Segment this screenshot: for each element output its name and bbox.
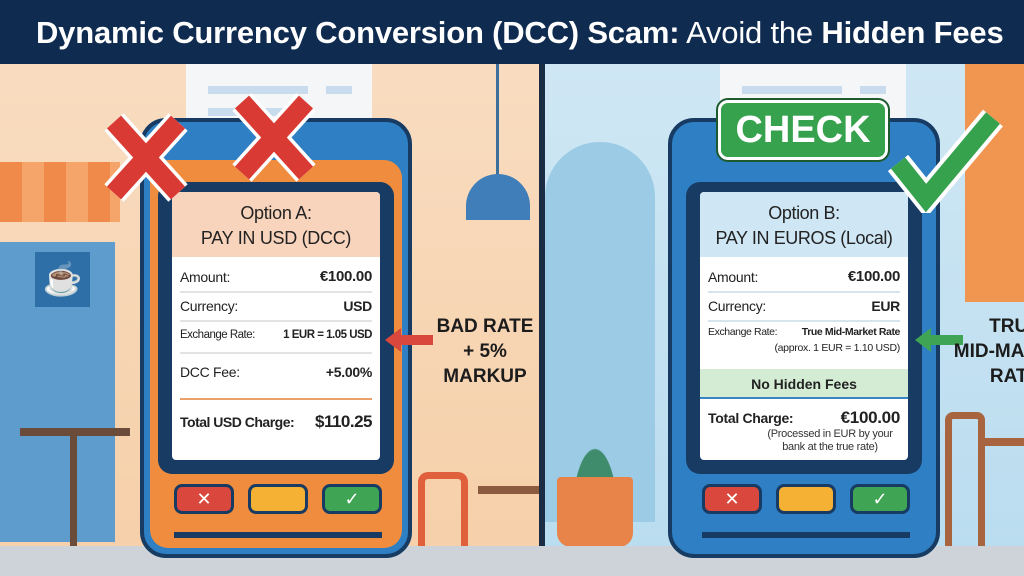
screen: Exchange Rate: [180,329,255,341]
callout: bad rate: MARKUP [443,366,527,387]
screen header A: Option A: [240,203,312,223]
panel: right terminal: ✕ [724,489,740,509]
callout: true mid-market rate [954,316,1024,387]
arrow: red [385,328,433,352]
screen: Currency: [180,298,238,314]
screen: Amount: [180,268,230,284]
screen: $110.25 [315,412,372,431]
badge: CHECK: CHECK [735,109,871,151]
panel: left terminal: ✕ [196,489,212,509]
screen header A: PAY IN USD (DCC) [201,228,351,248]
screen: USD [343,298,372,314]
icon: coffee sign [35,252,90,307]
screen header B: Option B: [768,203,840,223]
panel: right terminal: Exchange Rate: [708,326,777,338]
icon: red X 2 [232,93,316,182]
panel: right terminal: Amount: [708,268,758,284]
screen: DCC Fee: [180,364,240,380]
callout: bad rate [437,316,533,387]
screen header B: PAY IN EUROS (Local) [715,228,893,248]
panel: right terminal: €100.00 [848,268,900,285]
panel: right terminal: Currency: [708,298,766,314]
screen: +5.00% [326,364,372,380]
icon: red X 1 [104,113,188,202]
title: Dynamic Currency Conversion (DCC) Scam: Avoid the Hidden Fees [36,15,1004,50]
right background [545,62,1024,576]
callout: bad rate: + 5% [463,341,507,362]
panel: left terminal [140,118,412,558]
icon: green check [888,110,1003,213]
title [0,0,1024,64]
panel: right terminal: €100.00 [841,408,900,427]
screen header B [700,192,908,257]
panel: left terminal: ✓ [344,489,360,509]
screen: Total USD Charge: [180,414,294,430]
panel: right terminal: (Processed in EUR by your bank at the true rate) [767,428,893,453]
panel: right terminal: Total Charge: [708,410,793,426]
no hidden fees bar: No Hidden Fees [751,376,857,392]
receipt right [720,64,906,154]
panel: right terminal: (approx. 1 EUR = 1.10 USD) [774,342,900,354]
screen header A [172,192,380,257]
screen: €100.00 [320,268,372,285]
panel: right terminal: EUR [871,298,900,314]
icon: coffee sign: ☕ [43,261,82,297]
panel: right terminal: True Mid-Market Rate [802,326,900,338]
left background [0,62,540,576]
screen [158,182,394,474]
panel: right terminal [668,118,940,558]
receipt left [186,64,372,164]
callout: bad rate: BAD RATE [437,316,533,337]
no hidden fees bar [700,369,908,399]
arrow: green [915,328,963,352]
panel: right terminal: ✓ [872,489,888,509]
badge: CHECK [718,100,888,160]
screen: 1 EUR = 1.05 USD [283,329,372,341]
